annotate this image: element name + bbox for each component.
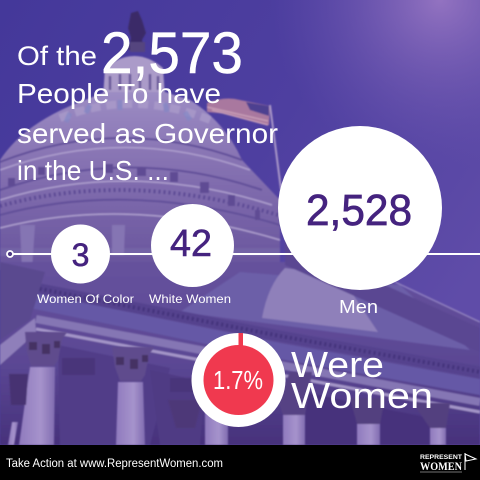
footer bar	[0, 445, 480, 480]
callout: were women: Were	[291, 344, 384, 385]
bubble: white women	[149, 204, 234, 306]
callout: were women	[291, 344, 433, 416]
bubble: women of color	[37, 224, 134, 306]
bubble: women of color: Women Of Color	[37, 292, 134, 306]
heading: People To have	[17, 78, 221, 109]
bubble: men: Men	[339, 297, 378, 317]
bubble: men: 2,528	[306, 186, 412, 235]
timeline line	[7, 251, 480, 257]
logo: RepresentWomen: WOMEN	[420, 461, 463, 473]
bubble: women of color: 3	[72, 237, 89, 273]
bubble: men	[278, 126, 442, 317]
heading: 2,573	[101, 21, 243, 86]
footer call to action: Take Action at www.RepresentWomen.com	[6, 458, 223, 470]
callout: were women: Women	[291, 375, 433, 416]
logo: RepresentWomen: REPRESENT	[420, 455, 462, 461]
heading: in the U.S. ...	[17, 155, 169, 186]
bubble: white women: 42	[170, 223, 212, 265]
background photo: capitol dome	[0, 11, 280, 270]
donut chart: 1.7% women: 1.7%	[213, 365, 263, 395]
bubble: white women: White Women	[149, 292, 231, 306]
logo: RepresentWomen	[420, 453, 476, 473]
heading: Of the	[17, 41, 97, 71]
background photo: columns	[8, 332, 450, 445]
heading: served as Governor	[17, 118, 278, 149]
background photo: portico and pediment	[0, 235, 480, 445]
heading	[17, 21, 278, 186]
background photo: flag	[207, 99, 283, 205]
donut chart: 1.7% women	[192, 333, 286, 427]
